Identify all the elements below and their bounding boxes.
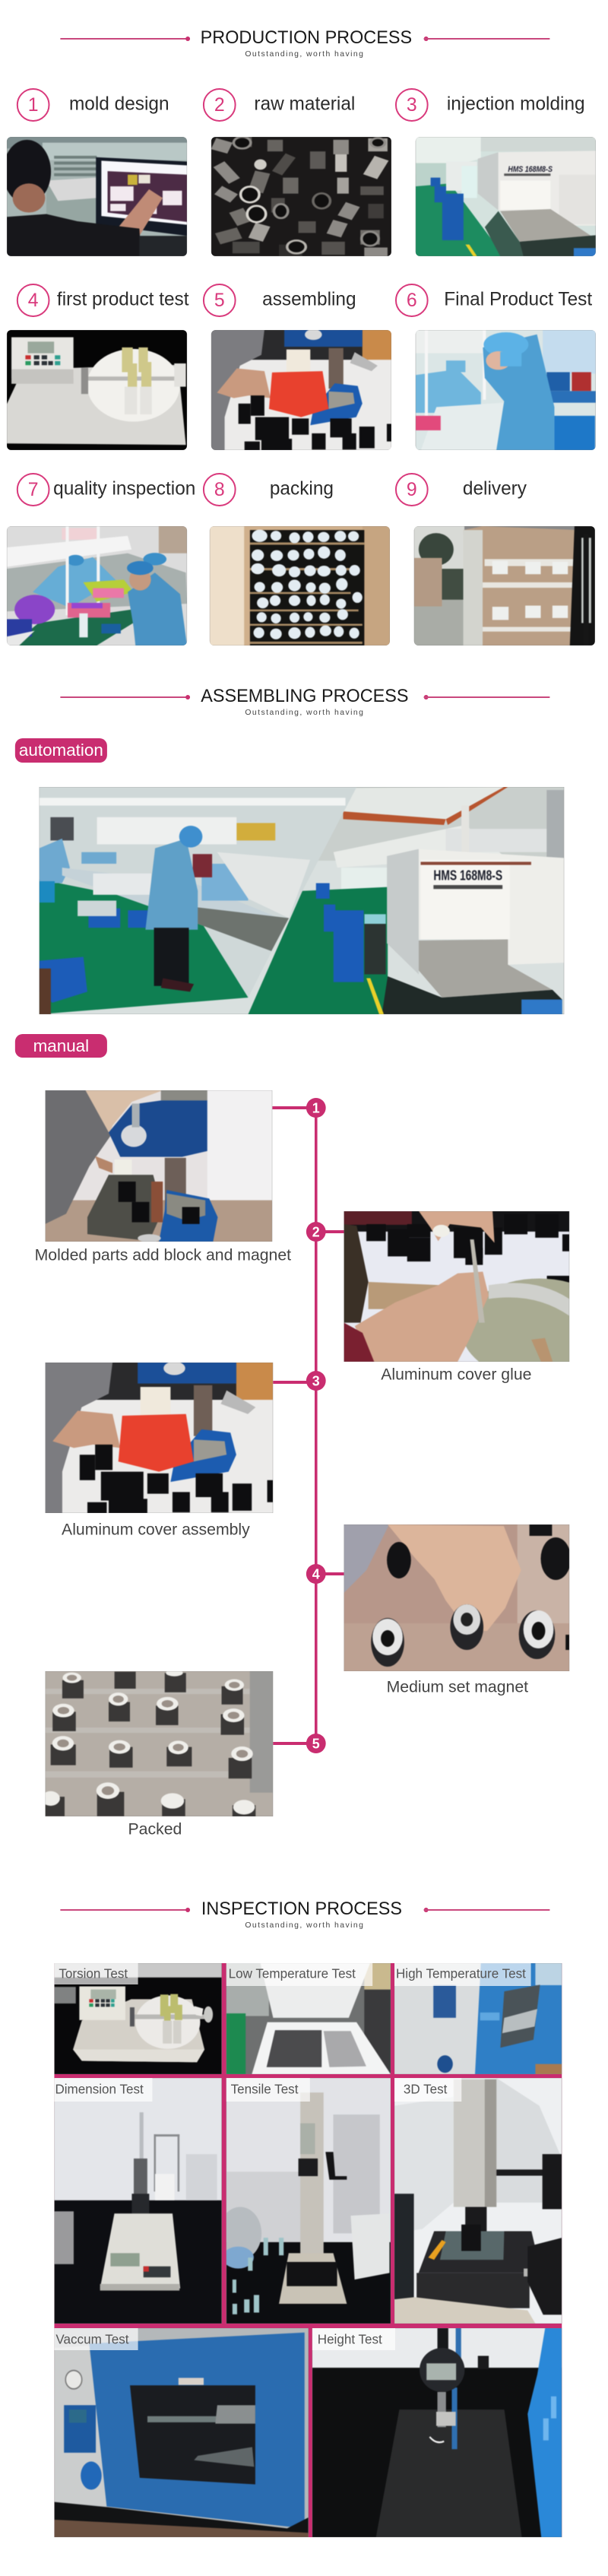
step label: injection molding bbox=[447, 94, 585, 115]
subtitle text: Outstanding, worth having bbox=[245, 708, 364, 717]
cell: torsion test bbox=[54, 1963, 222, 2074]
pill label: manual: manual bbox=[33, 1036, 89, 1055]
caption: Aluminum cover glue bbox=[381, 1365, 531, 1383]
title text: PRODUCTION PROCESS bbox=[201, 28, 412, 48]
label strip: height test: Height Test bbox=[318, 2331, 382, 2346]
step 4: first product test bbox=[6, 284, 189, 450]
number 9 badge: 9 bbox=[407, 479, 417, 500]
photo: automated factory floor: HMS 168M8-S bbox=[433, 867, 502, 883]
photo: injection molding machine: HMS 168M8-S bbox=[508, 164, 553, 174]
number 9 badge bbox=[395, 473, 429, 506]
node 5 bbox=[306, 1734, 326, 1753]
heading: inspection process bbox=[60, 1899, 550, 1930]
number 1 badge bbox=[17, 88, 49, 122]
photo: torsion testing machine bbox=[7, 330, 187, 450]
number 7 badge bbox=[17, 473, 49, 506]
number 7 badge: 7 bbox=[28, 479, 39, 500]
caption: Packed bbox=[128, 1819, 182, 1838]
step 1: mold design bbox=[6, 88, 187, 256]
title text: ASSEMBLING PROCESS bbox=[201, 687, 409, 706]
photo: hand setting magnets bbox=[344, 1524, 569, 1671]
number 6 badge: 6 bbox=[407, 290, 417, 311]
heading: assembling process bbox=[60, 687, 550, 717]
label strip: 3D test: 3D Test bbox=[404, 2081, 447, 2096]
step 3: injection molding bbox=[395, 88, 596, 256]
photo: inspection workers at belt bbox=[7, 526, 187, 646]
node 4 bbox=[306, 1564, 326, 1584]
photo: engineer at CAD monitor bbox=[7, 137, 187, 256]
assembly step 1 bbox=[35, 1090, 291, 1264]
node 2: 2 bbox=[312, 1224, 320, 1240]
step label: quality inspection bbox=[53, 479, 195, 500]
label strip: high temperature test: High Temperature Test bbox=[396, 1965, 526, 1981]
step label: assembling bbox=[262, 290, 356, 310]
label strip: low temperature test bbox=[226, 1963, 372, 1986]
step 2: raw material bbox=[202, 88, 391, 256]
node 5: 5 bbox=[312, 1736, 320, 1752]
photo: press and parts bbox=[46, 1090, 272, 1242]
node 4: 4 bbox=[312, 1566, 320, 1582]
pill label: manual bbox=[15, 1034, 107, 1058]
label strip: 3D test bbox=[394, 2078, 461, 2102]
step label: mold design bbox=[69, 94, 169, 115]
label strip: tensile test bbox=[226, 2078, 310, 2102]
node 3 bbox=[306, 1371, 326, 1391]
cell: dimension test bbox=[54, 2078, 222, 2324]
step 8: packing bbox=[202, 473, 390, 646]
caption: Molded parts add block and magnet bbox=[35, 1245, 291, 1264]
heading: production process bbox=[60, 28, 550, 59]
cell: 3D test bbox=[394, 2078, 562, 2324]
photo: press with red cloth bbox=[46, 1363, 273, 1513]
photo: cartons of parts bbox=[210, 526, 390, 646]
pill label: automation: automation bbox=[19, 741, 103, 760]
subtitle text: Outstanding, worth having bbox=[245, 1921, 364, 1930]
step label: packing bbox=[270, 479, 334, 500]
step 7: quality inspection bbox=[6, 473, 195, 646]
label strip: vacuum test bbox=[54, 2328, 138, 2350]
node 1: 1 bbox=[312, 1100, 320, 1116]
label strip: low temperature test: Low Temperature Test bbox=[229, 1965, 356, 1981]
number 6 badge bbox=[395, 284, 429, 317]
step 9: delivery bbox=[395, 473, 595, 646]
caption: Aluminum cover assembly bbox=[62, 1520, 250, 1538]
photo: workers in blue suits bbox=[416, 330, 596, 450]
node 1 bbox=[306, 1098, 326, 1118]
assembly step 5 bbox=[46, 1671, 274, 1838]
number 8 badge: 8 bbox=[214, 479, 225, 500]
cell: high temperature test bbox=[394, 1963, 562, 2074]
caption: Medium set magnet bbox=[387, 1677, 528, 1696]
label strip: dimension test: Dimension Test bbox=[55, 2081, 144, 2096]
photo: black metal cylinders bbox=[211, 137, 391, 256]
number 4 badge bbox=[17, 284, 49, 317]
timeline with numbered nodes bbox=[272, 1098, 344, 1753]
label strip: torsion test bbox=[54, 1963, 138, 1984]
number 5 badge: 5 bbox=[214, 290, 225, 311]
step label: delivery bbox=[463, 479, 527, 500]
number 4 badge: 4 bbox=[28, 290, 39, 311]
number 2 badge bbox=[203, 88, 236, 122]
photo: packed parts in plastic bbox=[46, 1671, 273, 1816]
number 1 badge: 1 bbox=[28, 94, 39, 116]
photo: gluing aluminum cover bbox=[344, 1211, 569, 1362]
label strip: dimension test bbox=[54, 2078, 152, 2102]
assembly step 3 bbox=[46, 1363, 274, 1538]
cell: low temperature test bbox=[226, 1963, 391, 2074]
step label: raw material bbox=[254, 94, 355, 115]
panel: production process bbox=[6, 28, 596, 646]
step label: first product test bbox=[57, 290, 189, 310]
photo: press with red cloth bbox=[211, 330, 391, 450]
photo: injection molding machine bbox=[416, 137, 596, 256]
step 6: final product test bbox=[395, 284, 596, 450]
number 8 badge bbox=[203, 473, 236, 506]
step 5: assembling bbox=[202, 284, 391, 450]
cell: height test bbox=[312, 2328, 562, 2537]
label strip: height test bbox=[312, 2328, 395, 2350]
node 2 bbox=[306, 1222, 326, 1242]
number 2 badge: 2 bbox=[214, 94, 225, 116]
node 3: 3 bbox=[312, 1373, 320, 1389]
assembly step 2 bbox=[344, 1211, 570, 1383]
assembly step 4 bbox=[344, 1524, 570, 1696]
number 3 badge: 3 bbox=[407, 94, 417, 116]
number 3 badge bbox=[395, 88, 429, 122]
label strip: tensile test: Tensile Test bbox=[231, 2081, 298, 2096]
photo: wrapped pallets and forklift bbox=[414, 526, 595, 646]
photo: automated factory floor bbox=[40, 787, 564, 1014]
panel: manual assembly flow bbox=[35, 1090, 570, 1838]
label strip: high temperature test bbox=[394, 1963, 531, 1986]
panel: assembling process bbox=[15, 687, 570, 1838]
test photo grid bbox=[54, 1963, 562, 2537]
title text: INSPECTION PROCESS bbox=[201, 1899, 402, 1919]
subtitle text: Outstanding, worth having bbox=[245, 49, 364, 59]
label strip: torsion test: Torsion Test bbox=[59, 1965, 128, 1981]
panel: inspection process bbox=[54, 1899, 562, 2537]
number 5 badge bbox=[203, 284, 236, 317]
cell: vacuum test bbox=[54, 2328, 309, 2537]
cell: tensile test bbox=[226, 2078, 391, 2324]
step label: Final Product Test bbox=[444, 290, 592, 310]
label strip: vacuum test: Vaccum Test bbox=[55, 2331, 128, 2346]
